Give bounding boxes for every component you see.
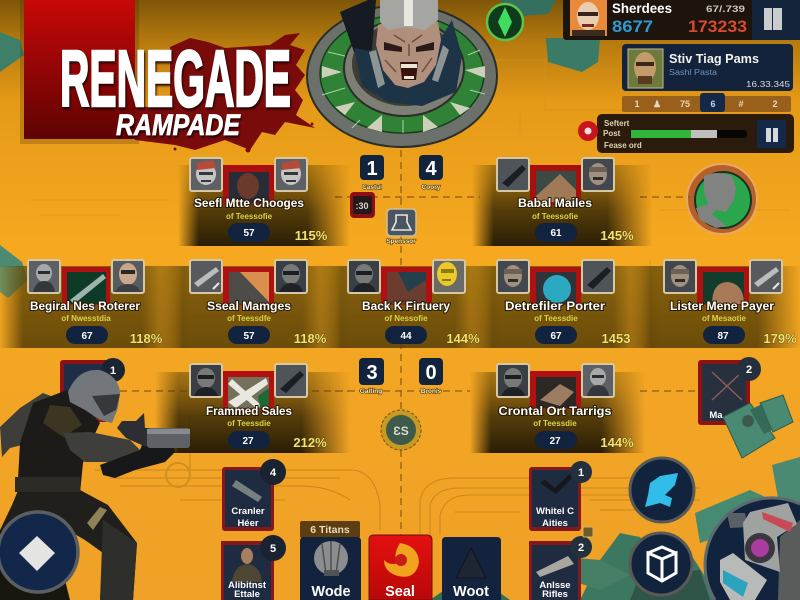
red timer badge	[350, 192, 375, 218]
unit card: Whitel C Aities: Whitel C	[536, 506, 574, 517]
card art	[536, 171, 576, 202]
panel: player score: 173233	[688, 17, 747, 36]
panel: player score	[563, 0, 800, 40]
unit card: Whitel C Aities: Aities	[542, 518, 568, 529]
card: Lister Mene Payer: 87	[717, 331, 729, 342]
panel: opponent card: Stiv Tiag Pams	[669, 51, 759, 66]
pause button	[757, 120, 786, 148]
status panel with progress bar: Post	[603, 129, 621, 138]
side card: right: 2	[746, 364, 752, 376]
opponent avatar	[628, 49, 663, 88]
score: 3: Gaiting	[360, 388, 382, 395]
card: Sseal Mamges: 118%	[294, 331, 327, 346]
unit card: Alibitnst Ettale: Alibitnst	[228, 580, 267, 591]
card: Begiral Nes Roterer: of Nwesstdia	[61, 314, 111, 323]
unit card: Alibitnst Ettale	[221, 535, 286, 600]
center unit icon: Spenssor	[386, 238, 416, 245]
portrait badge	[687, 164, 757, 234]
joystick button	[0, 512, 78, 592]
card: Frammed Sales: Frammed Sales	[206, 406, 292, 418]
card: Lister Mene Payer	[664, 260, 797, 346]
card: Detrefiler Porter: 1453	[602, 331, 630, 346]
helmet	[68, 370, 120, 423]
red banner	[20, 0, 139, 144]
count badge: 1	[578, 467, 584, 479]
unit card: Cranler Heer: Héer	[237, 518, 259, 529]
panel: opponent card: Sashl Pasta	[669, 68, 718, 77]
titans label	[300, 521, 360, 538]
center unit icon	[386, 209, 416, 245]
card: Babal Mailes	[472, 158, 652, 246]
dashed guide lines	[120, 150, 700, 600]
card: Crontal Ort Tarrigs: 144%	[600, 435, 634, 450]
count badge: 4	[270, 467, 277, 479]
forearm and gloves	[100, 437, 175, 478]
card art	[229, 172, 269, 203]
card: Seefl Mtte Chooges: 115%	[295, 228, 328, 243]
side card: left	[60, 358, 125, 422]
cape	[0, 393, 56, 457]
pause button	[752, 0, 800, 40]
card: Frammed Sales	[155, 364, 350, 453]
tab bar: 2	[772, 99, 778, 109]
medallion with character head	[307, 0, 497, 147]
card: Crontal Ort Tarrigs	[470, 364, 645, 453]
soldier with rifle	[0, 370, 190, 600]
score: 0	[419, 358, 443, 395]
row 2 band	[0, 266, 800, 348]
card: Crontal Ort Tarrigs: Crontal Ort Tarrigs	[498, 406, 612, 418]
card: Frammed Sales: of Teessdie	[227, 419, 271, 428]
card: Sseal Mamges: 57	[243, 331, 255, 342]
side card: right: Ma	[709, 410, 723, 421]
button: box	[630, 533, 692, 595]
card art	[229, 272, 269, 304]
panel: opponent card: 16.33.345	[746, 80, 791, 89]
side card: left: 1	[110, 365, 116, 377]
icon: green diamond badge	[487, 4, 523, 40]
tab: Seal (selected)	[369, 535, 432, 600]
card art	[228, 377, 269, 408]
card: Babal Mailes: 61	[550, 228, 562, 239]
helmet	[380, 0, 438, 30]
unit card: Anlsse Rifles: Rifles	[542, 589, 568, 600]
green cube	[723, 395, 793, 458]
title: Renegade Rampage: RAMPADE	[116, 109, 241, 142]
title: Renegade Rampage: RENEGADE	[60, 34, 291, 123]
card: Back K Firtuery: 144%	[446, 331, 480, 346]
red timer badge: :30	[355, 201, 369, 211]
unit card: Cranler Heer	[222, 459, 286, 531]
panel: player score: 67/.739	[706, 4, 745, 14]
tab: Woot: Woot	[453, 584, 489, 600]
card: Seefl Mtte Chooges: 57	[243, 228, 255, 239]
card: Begiral Nes Roterer	[28, 260, 163, 346]
tab bar: ♟	[653, 99, 661, 109]
card: Lister Mene Payer: Lister Mene Payer	[670, 301, 775, 313]
belt	[15, 477, 80, 492]
unit card: Alibitnst Ettale: Ettale	[234, 589, 260, 600]
card: Sseal Mamges: Sseal Mamges	[207, 301, 291, 313]
count badge: 2	[578, 542, 584, 554]
tab: Wode: Wode	[311, 584, 351, 600]
triangle icon	[456, 548, 486, 578]
score: 4: Coory	[422, 184, 441, 191]
card: Detrefiler Porter: 67	[550, 331, 562, 342]
tab bar: 75	[680, 99, 690, 109]
knee strap	[87, 507, 107, 530]
shoulder plate	[43, 405, 82, 437]
card: Detrefiler Porter: of Teessdie	[534, 314, 578, 323]
card: Seefl Mtte Chooges: of Teessofie	[226, 212, 273, 221]
card: Frammed Sales: 212%	[293, 435, 327, 450]
progress bar	[630, 130, 747, 138]
weapon art	[536, 556, 574, 577]
card: Sseal Mamges: of Teessdfe	[227, 314, 271, 323]
side card: right	[698, 357, 761, 425]
card: Begiral Nes Roterer: 67	[81, 331, 93, 342]
titans label: 6 Titans	[310, 524, 350, 536]
tab: Seal (selected): Seal	[385, 584, 415, 600]
card art	[536, 272, 576, 304]
tab bar	[622, 93, 791, 112]
card: Babal Mailes: of Teessofie	[532, 212, 579, 221]
card: Seefl Mtte Chooges: Seefl Mtte Chooges	[194, 198, 304, 210]
card art	[67, 272, 106, 304]
card: Detrefiler Porter	[497, 260, 630, 346]
card: Seefl Mtte Chooges	[178, 158, 350, 246]
card: Crontal Ort Tarrigs: 27	[549, 436, 561, 447]
panel: player score: Sherdees	[612, 0, 672, 16]
card: Back K Firtuery: Back K Firtuery	[362, 301, 451, 313]
shell icon	[314, 541, 348, 576]
score: 0: Bronis	[421, 388, 442, 395]
status panel with progress bar	[578, 114, 794, 153]
torso	[17, 390, 100, 497]
unit card: Cranler Heer: Cranler	[231, 506, 265, 517]
card: Begiral Nes Roterer: Begiral Nes Roterer	[30, 301, 141, 313]
button: cyan dash	[630, 458, 694, 522]
title: Renegade Rampage	[60, 34, 291, 142]
record button	[578, 121, 598, 141]
score: 3	[359, 358, 384, 395]
card: Crontal Ort Tarrigs: of Teessdie	[533, 419, 577, 428]
face	[376, 14, 441, 88]
center medal	[381, 410, 421, 450]
player avatar	[570, 0, 607, 36]
score: 3: 3	[366, 362, 378, 384]
portrait art	[232, 548, 262, 582]
tab bar: 6	[710, 99, 716, 109]
score: 4	[419, 155, 443, 191]
weapon art	[540, 472, 576, 494]
panel: player score: 8677	[612, 17, 653, 36]
rifle	[117, 413, 190, 448]
card: Back K Firtuery: 44	[400, 331, 412, 342]
tab: Wode	[300, 537, 361, 600]
card: Lister Mene Payer: of Mesaotie	[702, 314, 747, 323]
button: camera robot	[705, 498, 800, 600]
card: Sseal Mamges	[190, 260, 327, 346]
score: 1	[360, 155, 384, 191]
card: Babal Mailes: Babal Mailes	[518, 198, 592, 210]
card art	[703, 272, 744, 304]
flame icon	[384, 543, 419, 577]
card: Frammed Sales: 27	[242, 436, 254, 447]
upper arm	[63, 432, 140, 462]
score: 0: 0	[425, 362, 437, 384]
unit card: Anlsse Rifles: Anlsse	[539, 580, 571, 591]
count badge: 5	[270, 543, 276, 555]
tab bar: #	[738, 99, 744, 109]
center medal: ƐS	[393, 424, 409, 438]
weapon art	[232, 480, 262, 502]
status panel with progress bar: Seftert	[604, 119, 630, 128]
card art	[387, 272, 426, 304]
hips and front leg	[0, 490, 137, 600]
card: Lister Mene Payer: 179%	[763, 331, 797, 346]
small gold marker	[583, 527, 593, 537]
score: 1: 1	[366, 158, 378, 180]
card: Back K Firtuery	[348, 260, 480, 346]
panel: opponent card	[622, 44, 793, 91]
score: 4: 4	[425, 158, 437, 180]
card: Begiral Nes Roterer: 118%	[130, 331, 163, 346]
card: Babal Mailes: 145%	[600, 228, 634, 243]
card: Back K Firtuery: of Nessofie	[384, 314, 428, 323]
status panel with progress bar: Fease ord	[604, 141, 642, 150]
card: Detrefiler Porter: Detrefiler Porter	[505, 301, 606, 313]
tab: Woot	[442, 537, 501, 600]
unit card: Whitel C Aities	[529, 461, 592, 531]
card art	[536, 377, 576, 408]
blood splatter	[135, 33, 315, 152]
tab bar: 1	[634, 99, 640, 109]
unit card: Anlsse Rifles	[529, 536, 592, 600]
score: 1: Castul	[362, 184, 382, 191]
